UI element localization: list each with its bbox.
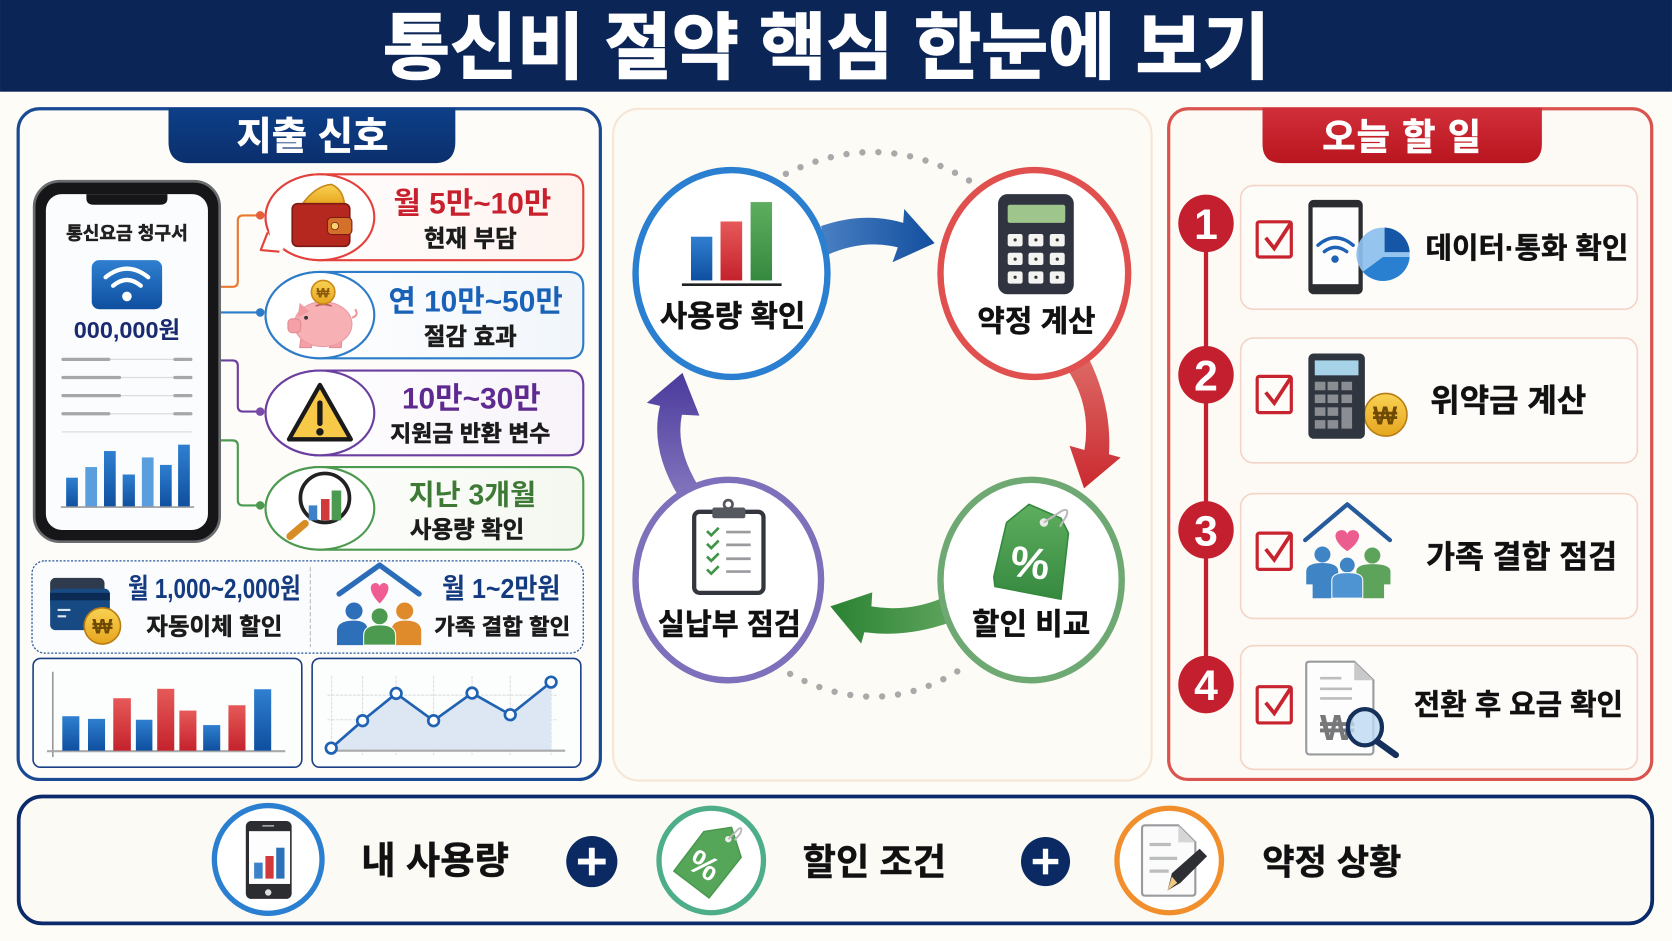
discounts box: 가족 결합 할인 xyxy=(434,614,570,639)
card: 월 5만~10만 xyxy=(261,174,583,260)
step: 할인 비교 xyxy=(940,480,1122,680)
panel: 오늘 할 일 xyxy=(1169,108,1652,779)
step 3: 가족 결합 점검 xyxy=(1426,539,1617,574)
icon: credit card and coin: ₩ xyxy=(92,614,113,638)
icon: phone and pie xyxy=(1308,200,1410,294)
arrow: red xyxy=(1066,356,1121,488)
icon: discount tag: % xyxy=(1008,537,1052,590)
phone bill illustration: 통신요금 청구서 xyxy=(66,223,188,243)
checkbox xyxy=(1257,687,1291,723)
discounts box: 월 1,000~2,000원 xyxy=(128,573,301,604)
icon: clipboard checklist xyxy=(694,500,763,593)
number 2 xyxy=(1178,346,1234,404)
arrow: green xyxy=(830,592,949,644)
icon: discount tag: % xyxy=(682,843,726,889)
number 1 xyxy=(1178,195,1234,252)
heading: 오늘 할 일: 오늘 할 일 xyxy=(1322,116,1482,157)
discounts box: 자동이체 할인 xyxy=(146,613,282,639)
connectors from phone to cards xyxy=(220,211,264,510)
plus xyxy=(1021,837,1070,886)
number 2: 2 xyxy=(1194,352,1218,400)
icon: credit card and coin xyxy=(50,578,121,644)
card: 연 10만~50만 xyxy=(266,272,583,358)
step 1: 데이터·통화 확인 xyxy=(1426,233,1628,265)
icon: piggy bank: ₩ xyxy=(317,284,331,300)
dotted arcs xyxy=(786,152,970,697)
item: 약정 상황 xyxy=(1117,808,1401,913)
checkbox xyxy=(1257,533,1291,569)
icon: bar chart xyxy=(682,202,782,285)
icon: wifi tile xyxy=(92,260,162,309)
card: 월 5만~10만: 월 5만~10만 xyxy=(393,187,551,220)
panel: 하단 요약 xyxy=(19,797,1652,923)
card: 월 5만~10만: 현재 부담 xyxy=(424,225,517,251)
card: 10만~30만: 10만~30만 xyxy=(402,382,541,415)
card: 연 10만~50만: 연 10만~50만 xyxy=(388,285,563,318)
step: 사용량 확인 xyxy=(636,170,827,377)
icon: family under roof xyxy=(337,565,421,645)
heading: 오늘 할 일 xyxy=(1263,108,1542,163)
number 3: 3 xyxy=(1194,507,1218,555)
number 4 xyxy=(1178,656,1234,713)
card: 10만~30만: 지원금 반환 변수 xyxy=(390,420,550,446)
icon: warning triangle xyxy=(289,385,351,439)
number 4: 4 xyxy=(1194,662,1218,710)
card: 지난 3개월: 사용량 확인 xyxy=(410,516,524,542)
icon: discount tag xyxy=(994,504,1068,599)
card: 10만~30만 xyxy=(266,371,583,455)
timeline line xyxy=(1204,224,1208,685)
card: 지난 3개월: 지난 3개월 xyxy=(409,478,536,510)
icon: document and pen xyxy=(1142,825,1207,896)
card: 연 10만~50만: 절감 효과 xyxy=(424,323,517,349)
item: 약정 상황: 약정 상황 xyxy=(1262,843,1401,882)
step 3 xyxy=(1178,494,1637,618)
icon: calculator and coin: ₩ xyxy=(1373,402,1398,430)
discounts box: 월 1~2만원 xyxy=(442,573,560,604)
step 4: 전환 후 요금 확인 xyxy=(1414,689,1623,721)
panel: 지출 신호 xyxy=(18,108,600,779)
bar chart xyxy=(33,658,302,767)
title: 통신비 절약 핵심 한눈에 보기 xyxy=(383,8,1270,89)
icon: document with magnifier xyxy=(1306,662,1396,755)
arrow: blue xyxy=(821,209,935,262)
icon: wallet xyxy=(292,184,352,246)
step: 실납부 점검: 실납부 점검 xyxy=(658,608,801,641)
icon: discount tag xyxy=(674,827,741,898)
item: 내 사용량: 내 사용량 xyxy=(361,839,509,881)
icon: family under roof xyxy=(1305,504,1390,598)
line chart xyxy=(312,658,581,767)
step: 약정 계산 xyxy=(940,170,1128,377)
plus xyxy=(566,836,617,887)
step: 약정 계산: 약정 계산 xyxy=(977,306,1096,339)
checkbox xyxy=(1257,222,1291,257)
heading: 지출 신호: 지출 신호 xyxy=(237,115,388,158)
icon: magnifier with chart xyxy=(290,473,349,536)
step 1 xyxy=(1178,186,1637,309)
step 2 xyxy=(1178,338,1637,463)
arrow: purple xyxy=(647,373,699,496)
checkbox xyxy=(1257,376,1291,413)
panel: 절약 순환 과정 xyxy=(613,109,1152,781)
icon: calculator and coin xyxy=(1308,353,1407,439)
icon: piggy bank xyxy=(288,280,357,348)
title banner xyxy=(0,0,1672,92)
number 1: 1 xyxy=(1194,201,1218,249)
item: 내 사용량 xyxy=(214,806,509,913)
icon: document with magnifier: ₩ xyxy=(1320,707,1355,748)
step 2: 위약금 계산 xyxy=(1430,383,1586,419)
step: 할인 비교: 할인 비교 xyxy=(972,608,1090,641)
icon: phone with chart xyxy=(246,821,292,899)
step: 사용량 확인: 사용량 확인 xyxy=(660,300,805,333)
step 4 xyxy=(1178,646,1637,769)
step: 실납부 점검 xyxy=(636,480,821,680)
card: 지난 3개월 xyxy=(266,467,583,550)
phone bill illustration: 000,000원 xyxy=(74,317,180,343)
item: 할인 조건: 할인 조건 xyxy=(803,841,946,882)
phone bill illustration xyxy=(34,181,220,542)
number 3 xyxy=(1178,501,1234,559)
heading: 지출 신호 xyxy=(169,108,455,163)
item: 할인 조건 xyxy=(659,808,946,913)
discounts box xyxy=(32,561,583,653)
icon: calculator xyxy=(998,194,1074,294)
